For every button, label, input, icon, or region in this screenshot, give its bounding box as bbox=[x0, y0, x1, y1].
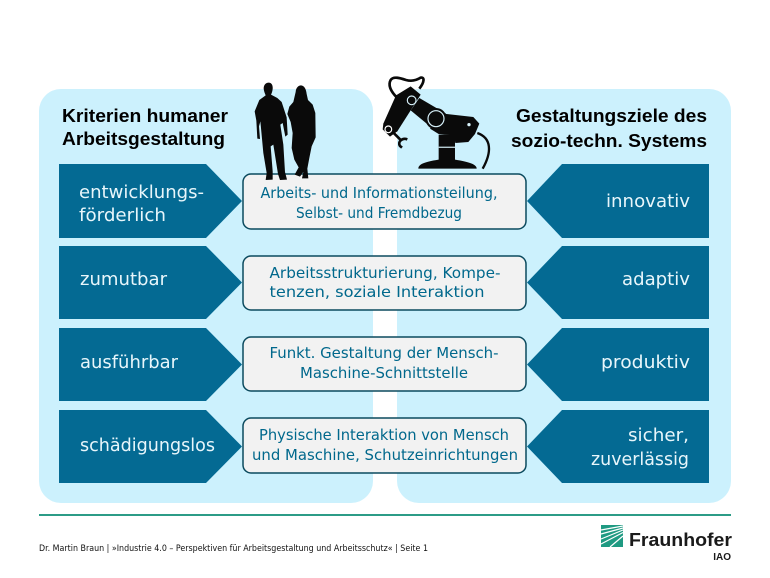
box: Arbeits- und Informationsteilung: Selbst- und Fremdbezug bbox=[296, 204, 462, 222]
left arrow: zumutbar bbox=[59, 246, 242, 319]
right arrow: adaptiv: adaptiv bbox=[622, 269, 690, 290]
left arrow: entwicklungsförderlich: entwicklungs- bbox=[79, 182, 204, 203]
right arrow: innovativ bbox=[527, 164, 709, 238]
box: Arbeits- und Informationsteilung: Arbeits- und Informationsteilung, bbox=[260, 184, 498, 202]
heading: Gestaltungsziele des sozio-techn. Systems: sozio-techn. Systems bbox=[511, 131, 707, 151]
right arrow: sicher, zuverlässig: zuverlässig bbox=[591, 449, 689, 470]
left arrow: entwicklungsförderlich bbox=[59, 164, 242, 238]
left arrow: ausführbar bbox=[59, 328, 242, 401]
box: Funkt. Gestaltung: Funkt. Gestaltung der Mensch- bbox=[270, 344, 498, 362]
box: Physische Interaktion: Physische Interaktion von Mensch bbox=[259, 426, 509, 444]
logo: Fraunhofer IAO: Fraunhofer bbox=[629, 530, 732, 550]
box: Physische Interaktion: und Maschine, Schutzeinrichtungen bbox=[252, 446, 518, 464]
box: Funkt. Gestaltung bbox=[243, 337, 526, 391]
box: Arbeits- und Informationsteilung bbox=[243, 174, 526, 229]
right arrow: sicher, zuverlässig bbox=[527, 410, 709, 483]
left arrow: entwicklungsförderlich: förderlich bbox=[79, 205, 166, 226]
right arrow: sicher, zuverlässig: sicher, bbox=[628, 425, 689, 446]
right arrow: adaptiv bbox=[527, 246, 709, 319]
right arrow: produktiv bbox=[527, 328, 709, 401]
box: Arbeitsstrukturierung: tenzen, soziale Interaktion bbox=[270, 283, 484, 301]
box: Physische Interaktion bbox=[243, 418, 526, 473]
logo: Fraunhofer IAO bbox=[601, 525, 732, 563]
box: Funkt. Gestaltung: Maschine-Schnittstelle bbox=[300, 364, 468, 382]
heading: Kriterien humaner Arbeitsgestaltung: Arbeitsgestaltung bbox=[62, 129, 225, 149]
heading: Kriterien humaner Arbeitsgestaltung: Kriterien humaner bbox=[62, 106, 228, 126]
footer rule bbox=[39, 514, 731, 516]
box: Arbeitsstrukturierung: Arbeitsstrukturierung, Kompe- bbox=[270, 264, 500, 282]
panel: left background bbox=[39, 89, 373, 503]
icon: robot arm bbox=[383, 78, 489, 169]
left arrow: schädigungslos bbox=[59, 410, 242, 483]
panel: right background bbox=[397, 89, 731, 503]
left arrow: zumutbar: zumutbar bbox=[80, 269, 168, 290]
right arrow: produktiv: produktiv bbox=[601, 352, 690, 373]
logo: Fraunhofer IAO: IAO bbox=[713, 552, 731, 563]
footer text: Dr. Martin Braun | »Industrie 4.0 – Perspektiven für Arbeitsgestaltung und Arbeitsschutz« | Seite 1 bbox=[39, 544, 428, 554]
left arrow: ausführbar: ausführbar bbox=[80, 352, 179, 373]
right arrow: innovativ: innovativ bbox=[606, 191, 690, 212]
icon: people silhouettes bbox=[255, 83, 316, 180]
heading: Gestaltungsziele des sozio-techn. Systems bbox=[511, 106, 707, 151]
left arrow: schädigungslos: schädigungslos bbox=[80, 435, 215, 456]
box: Arbeitsstrukturierung bbox=[243, 256, 526, 310]
heading: Gestaltungsziele des sozio-techn. Systems: Gestaltungsziele des bbox=[516, 106, 707, 126]
heading: Kriterien humaner Arbeitsgestaltung bbox=[62, 106, 228, 149]
